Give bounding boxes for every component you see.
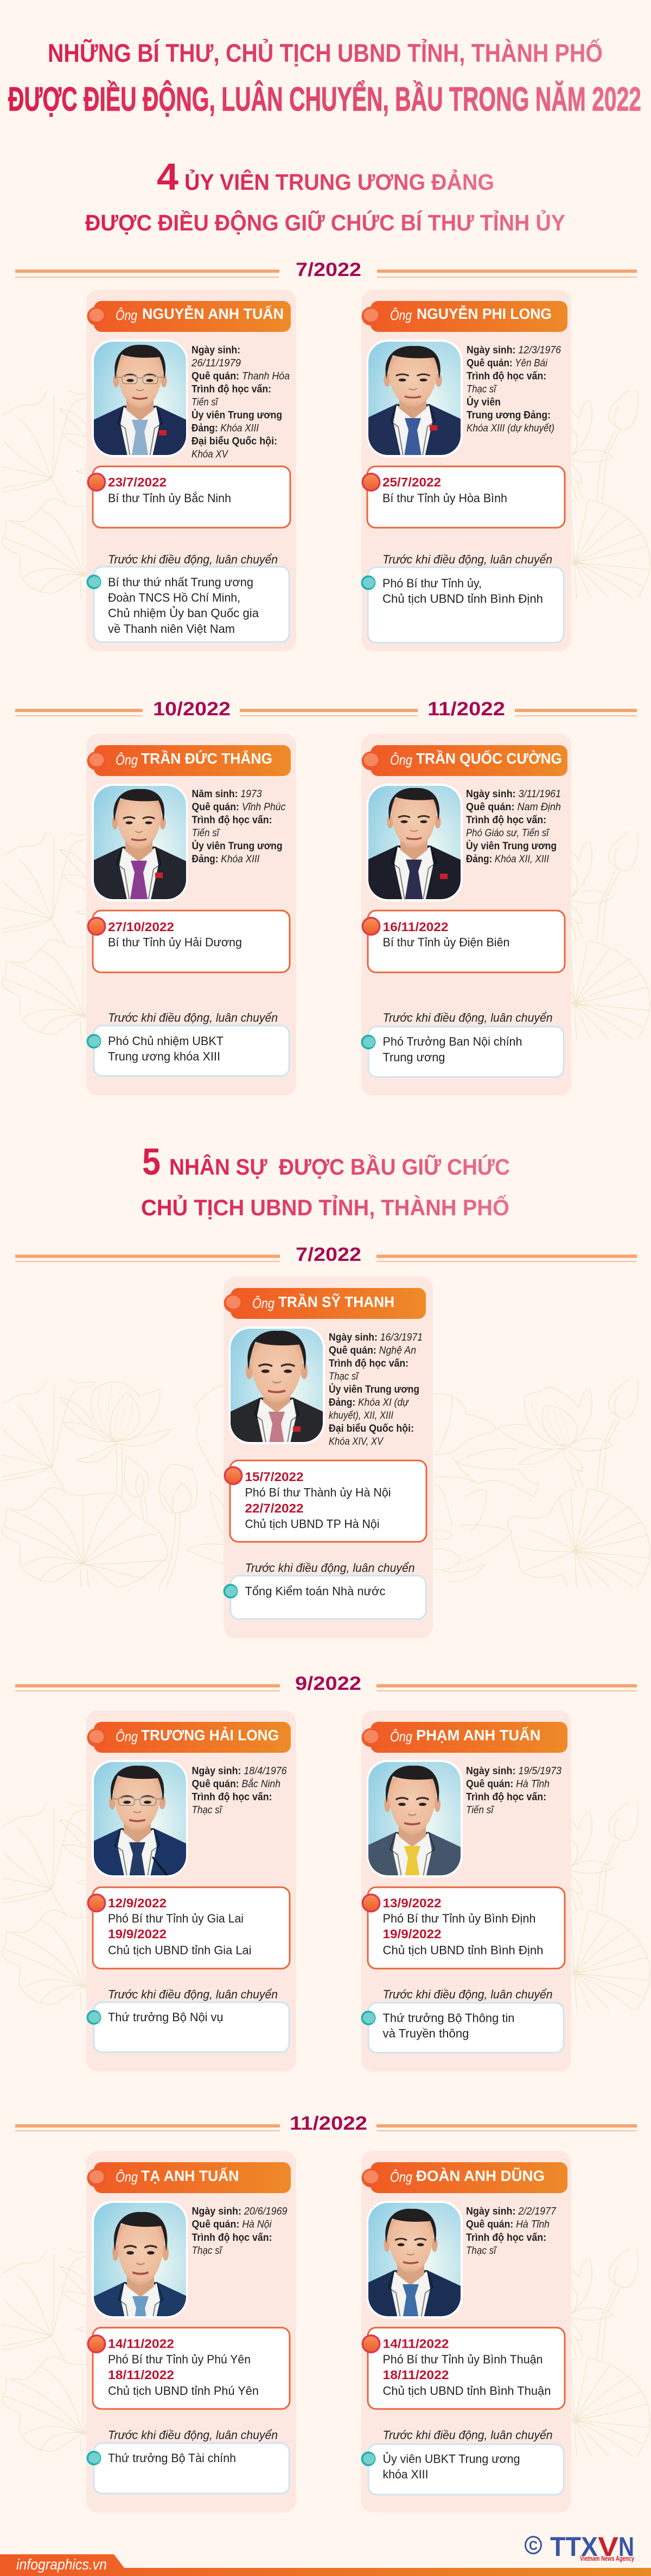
panel: Nguyễn Phi Long	[350, 290, 571, 651]
name bar: Ông	[116, 1728, 138, 1745]
name bar: TRẦN SỸ THANH	[278, 1293, 394, 1310]
biography text: Ngày sinh: 20/6/1969	[192, 2206, 288, 2217]
previous role box	[87, 1026, 289, 1076]
appointment box: 12/9/2022	[108, 1896, 167, 1910]
heading: 5 nhân sự: NHÂN SỰ ĐƯỢC BẦU GIỮ CHỨC	[169, 1154, 510, 1180]
biography text: Quê quán: Nghệ An	[329, 1345, 416, 1356]
appointment box	[87, 911, 290, 972]
biography text	[329, 1332, 423, 1447]
previous role label: Trước khi điều động, luân chuyển	[382, 553, 552, 566]
name bar: TRẦN ĐỨC THẮNG	[141, 750, 272, 767]
month divider: 10/2022 and 11/2022: 10/2022	[153, 699, 231, 720]
panel: Trần Sỹ Thanh	[214, 1277, 433, 1638]
previous role box	[87, 2002, 289, 2052]
biography text: Trình độ học vấn:	[466, 815, 546, 826]
heading: 4 ủy viên trung ương: 4	[157, 156, 178, 198]
logo: TTXVN: C	[529, 2539, 538, 2553]
biography text	[192, 789, 286, 865]
appointment box: 16/11/2022	[383, 920, 448, 934]
panel: Trần Đức Thắng	[76, 734, 296, 1095]
biography text: Thạc sĩ	[466, 2245, 497, 2257]
appointment box: Chủ tịch UBND tỉnh Phú Yên	[108, 2384, 259, 2398]
name bar	[224, 1288, 426, 1319]
previous role box	[361, 2444, 564, 2495]
appointment box: 27/10/2022	[108, 920, 174, 934]
biography text: Đại biểu Quốc hội:	[329, 1423, 414, 1434]
biography text: Quê quán: Hà Tĩnh	[466, 2219, 550, 2230]
name bar: Ông	[116, 307, 137, 323]
previous role label: Trước khi điều động, luân chuyển	[383, 1011, 552, 1024]
appointment box: 19/9/2022	[108, 1927, 167, 1941]
previous role box	[361, 1027, 564, 1077]
biography text: Quê quán: Bắc Ninh	[192, 1779, 280, 1790]
appointment box	[87, 1887, 290, 1969]
appointment box	[361, 911, 565, 972]
previous role box: Phó Trưởng Ban Nội chính	[383, 1035, 522, 1048]
month divider: 9/2022	[15, 1673, 637, 1694]
biography text: Đảng: Khóa XIII	[192, 854, 260, 865]
appointment box	[87, 2328, 290, 2409]
appointment box	[87, 466, 290, 528]
biography text: Trung ương Đảng:	[467, 410, 551, 421]
biography text: Thạc sĩ	[192, 1805, 223, 1816]
appointment box: 23/7/2022	[108, 475, 167, 489]
title	[8, 39, 641, 118]
name bar	[87, 301, 291, 332]
name bar: Ông	[116, 2169, 138, 2185]
name bar: PHẠM ANH TUẤN	[416, 1727, 540, 1744]
appointment box: Phó Bí thư Tỉnh ủy Gia Lai	[108, 1912, 244, 1925]
appointment box	[361, 2328, 565, 2409]
appointment box	[361, 466, 565, 528]
previous role box: Phó Bí thư Tỉnh ủy,	[382, 576, 482, 590]
portrait photo	[367, 2201, 463, 2318]
biography text: Ngày sinh: 19/5/1973	[466, 1766, 561, 1777]
biography text	[466, 1766, 561, 1816]
biography text: Trình độ học vấn:	[466, 1792, 546, 1803]
portrait photo	[92, 2201, 188, 2318]
name bar: Ông	[390, 2169, 412, 2185]
name bar	[87, 745, 291, 776]
biography text: Ủy viên	[467, 396, 501, 408]
biography text: Quê quán: Nam Định	[466, 802, 561, 813]
biography text: Quê quán: Thanh Hóa	[192, 371, 290, 382]
appointment box: Bí thư Tỉnh ủy Điện Biên	[383, 935, 510, 949]
previous role label: Trước khi điều động, luân chuyển	[108, 2428, 278, 2442]
biography text: Quê quán: Yên Bái	[467, 358, 548, 369]
biography text: Ủy viên Trung ương	[329, 1383, 419, 1395]
biography text: Trình độ học vấn:	[466, 2232, 546, 2244]
panel: Trần Quốc Cường	[352, 734, 571, 1095]
previous role label: Trước khi điều động, luân chuyển	[108, 1988, 278, 2001]
previous role label: Trước khi điều động, luân chuyển	[383, 2428, 552, 2442]
biography text	[192, 2206, 288, 2257]
previous role box: Chủ tịch UBND tỉnh Bình Định	[382, 592, 543, 605]
month divider: 7/2022	[15, 259, 637, 280]
previous role label: Trước khi điều động, luân chuyển	[108, 553, 278, 566]
appointment box: 14/11/2022	[383, 2336, 449, 2350]
previous role box	[87, 2443, 289, 2494]
previous role box: Ủy viên UBKT Trung ương	[383, 2452, 520, 2465]
appointment box: 19/9/2022	[383, 1927, 442, 1941]
biography text: Ủy viên Trung ương	[192, 409, 282, 421]
previous role box: Chủ nhiệm Ủy ban Quốc gia	[108, 606, 259, 620]
biography text: Trình độ học vấn:	[192, 2232, 272, 2244]
biography text: khuyết), XII, XIII	[329, 1410, 394, 1421]
biography text: Trình độ học vấn:	[192, 384, 271, 395]
name bar: Ông	[390, 1728, 412, 1745]
biography text: Phó Giáo sư, Tiến sĩ	[466, 828, 550, 839]
appointment box: 18/11/2022	[383, 2368, 449, 2382]
name bar: TẠ ANH TUẤN	[141, 2167, 239, 2184]
biography text: Quê quán: Hà Tĩnh	[466, 1779, 550, 1790]
previous role box: Thứ trưởng Bộ Thông tin	[383, 2011, 514, 2025]
previous role box: khóa XIII	[383, 2468, 429, 2481]
portrait photo	[367, 784, 463, 901]
appointment box: Bí thư Tỉnh ủy Bắc Ninh	[108, 491, 231, 505]
name bar	[361, 301, 567, 332]
heading: 4 ủy viên trung ương	[85, 156, 565, 235]
panel: Nguyễn Anh Tuấn	[78, 290, 296, 651]
biography text: Tiến sĩ	[192, 828, 220, 839]
logo: TTXVN: N	[618, 2532, 634, 2562]
appointment box: Bí thư Tỉnh ủy Hòa Bình	[382, 491, 507, 505]
biography text: Khóa XIII (dự khuyết)	[467, 423, 554, 434]
logo: TTXVN: V	[598, 2532, 619, 2562]
name bar	[87, 1722, 291, 1753]
biography text: Ngày sinh: 3/11/1961	[466, 789, 561, 800]
previous role label: Trước khi điều động, luân chuyển	[383, 1988, 552, 2001]
biography text: Trình độ học vấn:	[467, 371, 546, 382]
previous role box: và Truyền thông	[383, 2027, 469, 2040]
biography text	[466, 789, 561, 865]
previous role label: Trước khi điều động, luân chuyển	[108, 1011, 278, 1024]
portrait photo	[92, 339, 188, 457]
name bar: TRƯƠNG HẢI LONG	[141, 1726, 279, 1744]
name bar: Ông	[252, 1295, 275, 1311]
panel: Phạm Anh Tuấn	[350, 1710, 571, 2072]
biography text: Khóa XIV, XV	[329, 1436, 384, 1447]
name bar: Ông	[390, 307, 412, 323]
biography text: Ngày sinh: 2/2/1977	[466, 2206, 557, 2217]
biography text: Đảng: Khóa XI (dự	[329, 1397, 410, 1408]
biography text: Khóa XV	[192, 449, 229, 460]
previous role box	[87, 567, 289, 642]
biography text: Ngày sinh: 18/4/1976	[192, 1766, 287, 1777]
appointment box: 14/11/2022	[108, 2336, 174, 2350]
appointment box: 22/7/2022	[245, 1501, 304, 1515]
heading: 4 ủy viên trung ương: ỦY VIÊN TRUNG ƯƠNG ĐẢNG	[184, 169, 494, 195]
biography text: Ngày sinh: 12/3/1976	[467, 345, 561, 356]
biography text: Ủy viên Trung ương	[466, 840, 557, 852]
portrait photo	[92, 784, 188, 901]
biography text	[191, 345, 290, 460]
biography text: Thạc sĩ	[192, 2245, 223, 2257]
biography text: Đại biểu Quốc hội:	[192, 436, 277, 447]
appointment box: 15/7/2022	[245, 1470, 304, 1484]
previous role label: Trước khi điều động, luân chuyển	[245, 1561, 414, 1575]
month divider: 7/2022	[15, 1244, 637, 1265]
appointment box	[224, 1460, 426, 1542]
appointment box: Bí thư Tỉnh ủy Hải Dương	[108, 935, 242, 949]
previous role box	[361, 2003, 564, 2053]
biography text: Trình độ học vấn:	[192, 815, 272, 826]
biography text: Đảng: Khóa XIII	[192, 423, 259, 434]
biography text: Ủy viên Trung ương	[192, 840, 282, 852]
previous role box: Trung ương khóa XIII	[108, 1050, 220, 1063]
month divider: 9/2022: 9/2022	[295, 1673, 361, 1694]
name bar	[361, 2162, 567, 2193]
panel: Tạ Anh Tuấn	[78, 2151, 296, 2513]
appointment box: Phó Bí thư Tỉnh ủy Bình Thuận	[383, 2353, 542, 2366]
footer bar	[0, 2554, 651, 2576]
portrait photo	[229, 1327, 325, 1444]
name bar: TRẦN QUỐC CƯỜNG	[416, 749, 562, 767]
portrait photo	[367, 339, 463, 457]
month divider: 10/2022 and 11/2022	[15, 699, 637, 720]
appointment box: 13/9/2022	[383, 1896, 442, 1910]
previous role box: Trung ương	[383, 1050, 445, 1064]
previous role box	[224, 1576, 426, 1619]
previous role box	[361, 567, 564, 643]
month divider: 11/2022	[15, 2113, 637, 2134]
month divider: 10/2022 and 11/2022: 11/2022	[427, 699, 505, 720]
portrait photo	[92, 1760, 188, 1877]
biography text	[192, 1766, 287, 1816]
name bar	[361, 1722, 567, 1753]
appointment box	[361, 1887, 565, 1969]
panel: Đoàn Anh Dũng	[348, 2151, 571, 2513]
biography text	[466, 2206, 557, 2257]
biography text: Năm sinh: 1973	[192, 789, 262, 800]
name bar: Ông	[116, 752, 138, 768]
previous role box: Phó Chủ nhiệm UBKT	[108, 1034, 224, 1048]
appointment box: Phó Bí thư Thành ủy Hà Nội	[245, 1486, 391, 1499]
month divider: 11/2022: 11/2022	[290, 2113, 367, 2134]
biography text: Quê quán: Vĩnh Phúc	[192, 802, 286, 813]
month divider: 7/2022: 7/2022	[296, 1244, 361, 1265]
name bar	[361, 745, 567, 776]
panel: Trương Hải Long	[75, 1710, 296, 2072]
appointment box: Chủ tịch UBND tỉnh Bình Thuận	[383, 2384, 551, 2398]
biography text: 26/11/1979	[191, 358, 241, 369]
logo: TTXVN	[525, 2532, 635, 2562]
biography text: Quê quán: Hà Nội	[192, 2219, 272, 2230]
heading: 5 nhân sự: CHỦ TỊCH UBND TỈNH, THÀNH PHỐ	[141, 1194, 509, 1220]
appointment box: Phó Bí thư Tỉnh ủy Phú Yên	[108, 2353, 251, 2366]
previous role box: về Thanh niên Việt Nam	[108, 622, 235, 636]
biography text: Đảng: Khóa XII, XIII	[466, 854, 550, 865]
portrait photo	[367, 1760, 463, 1877]
appointment box: Chủ tịch UBND tỉnh Bình Định	[383, 1944, 544, 1957]
biography text: Tiến sĩ	[466, 1805, 494, 1816]
previous role box: Thứ trưởng Bộ Nội vụ	[108, 2010, 224, 2024]
previous role box: Bí thư thứ nhất Trung ương	[108, 575, 253, 589]
heading: 4 ủy viên trung ương: ĐƯỢC ĐIỀU ĐỘNG GIỮ CHỨC BÍ THƯ TỈNH ỦY	[85, 209, 565, 235]
heading: 5 nhân sự	[141, 1140, 510, 1220]
biography text: Ngày sinh: 16/3/1971	[329, 1332, 423, 1343]
biography text: Tiến sĩ	[192, 397, 219, 408]
footer bar: infographics.vn	[16, 2556, 107, 2573]
name bar: NGUYỄN ANH TUẤN	[142, 305, 284, 322]
biography text: Trình độ học vấn:	[329, 1358, 409, 1369]
heading: 5 nhân sự: 5	[142, 1140, 161, 1183]
biography text: Thạc sĩ	[467, 384, 497, 395]
appointment box: 25/7/2022	[382, 475, 441, 489]
biography text: Ngày sinh:	[192, 345, 240, 356]
month divider: 7/2022: 7/2022	[296, 259, 361, 280]
appointment box: Chủ tịch UBND tỉnh Gia Lai	[108, 1944, 252, 1957]
appointment box: Chủ tịch UBND TP Hà Nội	[245, 1517, 380, 1530]
previous role box: Tổng Kiểm toán Nhà nước	[245, 1585, 385, 1598]
biography text	[467, 345, 561, 434]
name bar: NGUYỄN PHI LONG	[417, 305, 552, 322]
biography text: Thạc sĩ	[329, 1371, 359, 1382]
previous role box: Thứ trưởng Bộ Tài chính	[108, 2451, 236, 2465]
appointment box: Phó Bí thư Tỉnh ủy Bình Định	[383, 1912, 536, 1925]
name bar: ĐOÀN ANH DŨNG	[416, 2167, 545, 2184]
logo: TTXVN: TTX	[550, 2532, 598, 2562]
biography text: Trình độ học vấn:	[192, 1792, 272, 1803]
name bar: Ông	[390, 752, 412, 768]
previous role box: Đoàn TNCS Hồ Chí Minh,	[108, 591, 240, 604]
name bar	[87, 2162, 291, 2193]
appointment box: 18/11/2022	[108, 2368, 174, 2382]
